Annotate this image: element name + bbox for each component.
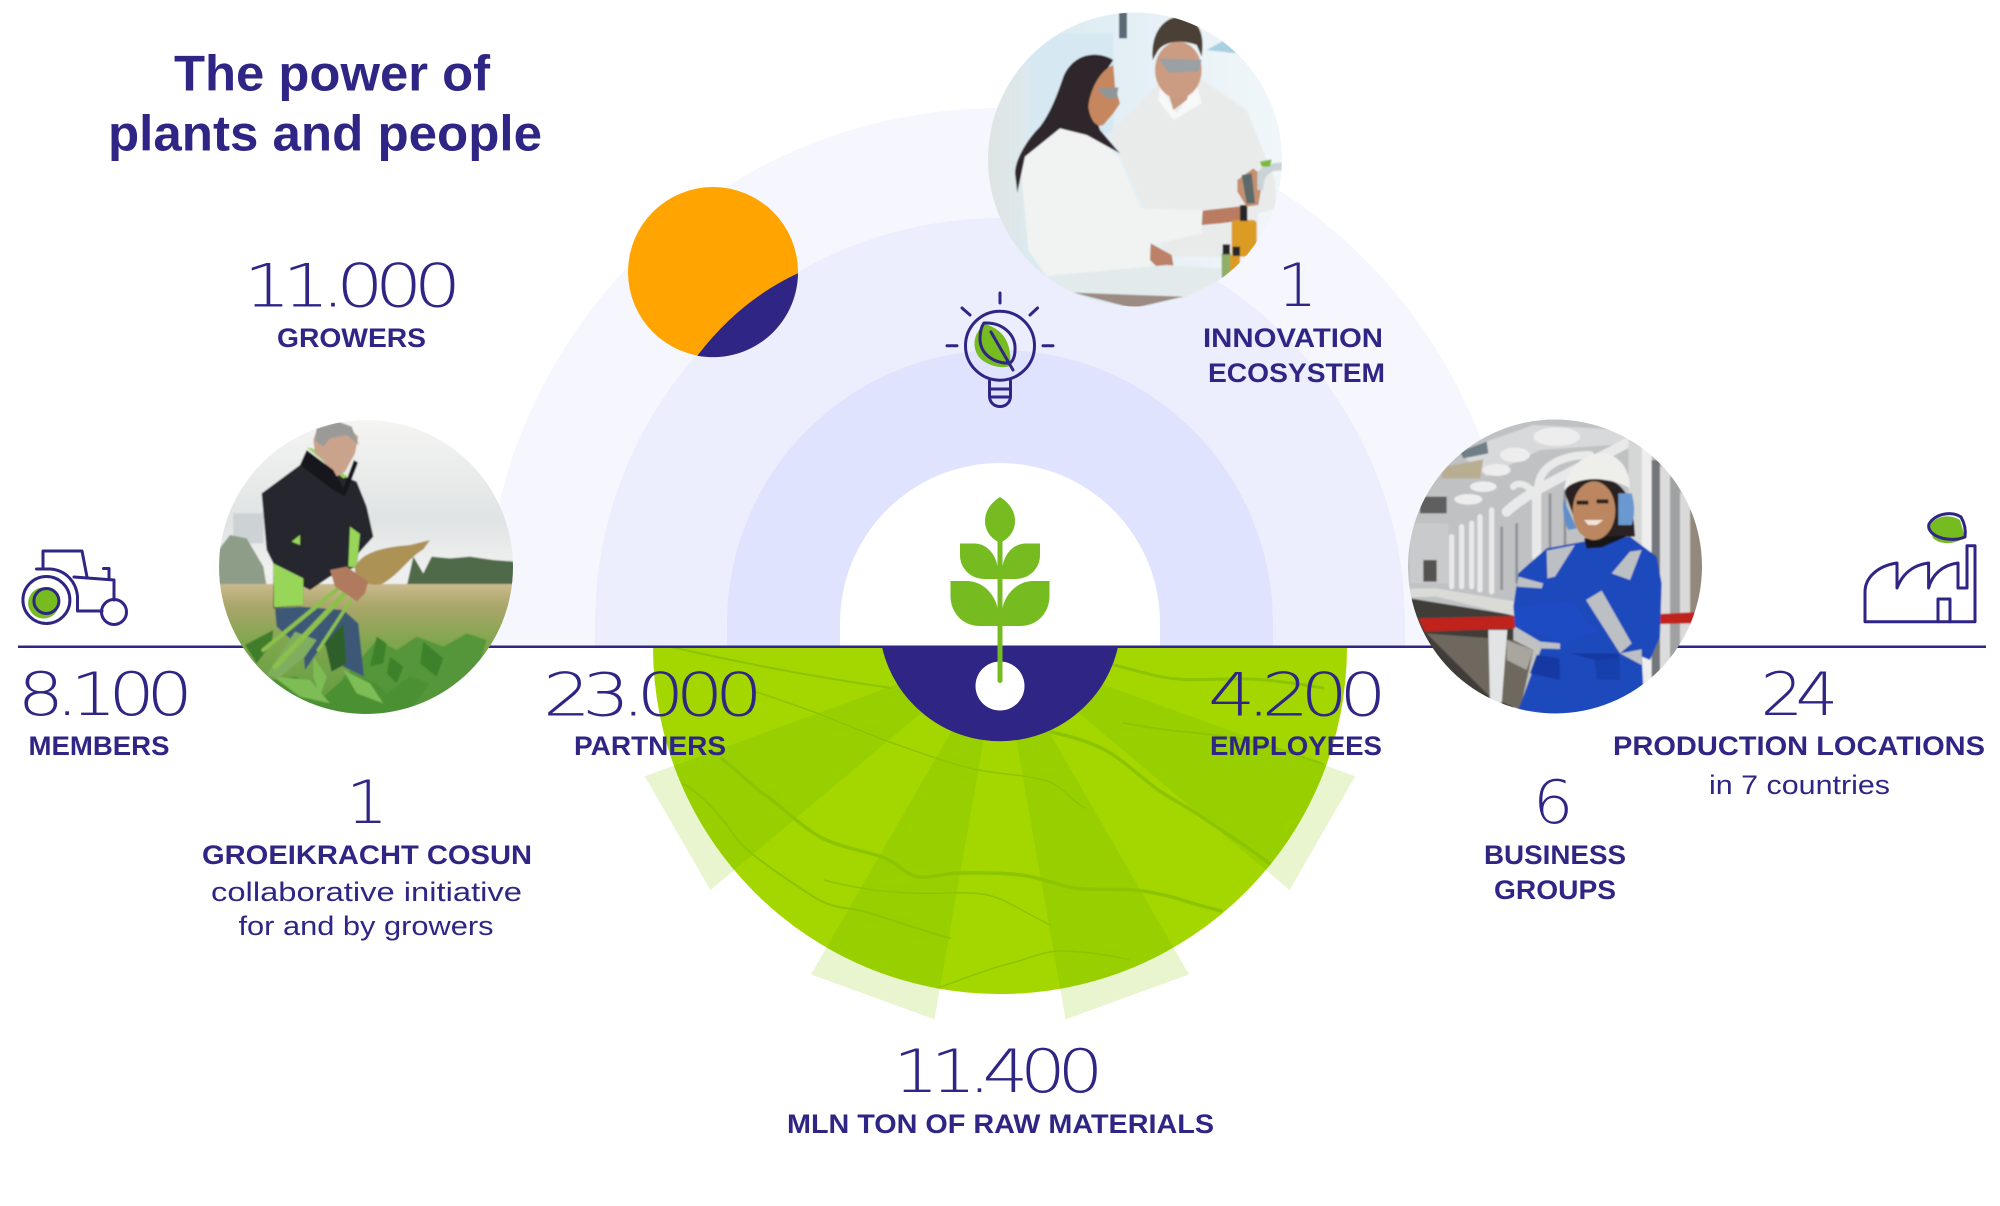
stat: business groups xyxy=(1484,768,1626,905)
stat: raw materials xyxy=(787,1037,1214,1139)
stat: innovation ecosystem xyxy=(1203,251,1385,388)
concentric arches xyxy=(485,108,1515,647)
stat: production locations: 24 xyxy=(1760,660,1834,730)
stat: members xyxy=(18,660,187,761)
stat: business groups: GROUPS xyxy=(1494,875,1616,905)
icon: lightbulb with leaf xyxy=(947,293,1053,406)
stat: innovation ecosystem: INNOVATION xyxy=(1203,323,1383,353)
photo: two scientists in a lab xyxy=(983,10,1287,310)
stat: production locations xyxy=(1613,660,1985,800)
icon: factory with leaf xyxy=(1865,514,1975,622)
stat: members: MEMBERS xyxy=(28,731,170,761)
title: The power of xyxy=(174,46,490,102)
stat: business groups: 6 xyxy=(1533,768,1568,838)
icon: plant xyxy=(950,497,1050,683)
stat: partners xyxy=(543,660,756,761)
stat: groeikracht cosun: GROEIKRACHT COSUN xyxy=(202,840,532,870)
stat: employees: EMPLOYEES xyxy=(1210,731,1382,761)
stat: groeikracht cosun: collaborative initiative xyxy=(211,877,522,907)
seed circle xyxy=(976,662,1024,710)
stat: innovation ecosystem: ECOSYSTEM xyxy=(1208,358,1385,388)
stat: production locations: PRODUCTION LOCATIONS xyxy=(1613,731,1985,761)
stat: growers xyxy=(244,252,455,353)
stat: growers: GROWERS xyxy=(277,323,426,353)
photo: plant worker in blue overalls xyxy=(1408,420,1702,714)
navy soil half circle xyxy=(882,647,1118,741)
green half circle with rays xyxy=(645,647,1355,1019)
stat: employees: 4.200 xyxy=(1208,660,1380,730)
stat: innovation ecosystem: 1 xyxy=(1277,251,1311,321)
title xyxy=(108,46,542,162)
stat: business groups: BUSINESS xyxy=(1484,840,1626,870)
stat: groeikracht cosun: 1 xyxy=(346,768,381,838)
horizontal baseline xyxy=(18,646,1986,648)
stat: raw materials: 11.400 xyxy=(893,1037,1097,1107)
stat: partners: 23.000 xyxy=(543,660,756,730)
stat: groeikracht cosun: for and by growers xyxy=(238,911,494,941)
title: plants and people xyxy=(108,106,542,162)
stat: raw materials: MLN TON OF RAW MATERIALS xyxy=(787,1109,1214,1139)
photo: farmer with sugar beet xyxy=(219,420,513,714)
stat: groeikracht cosun xyxy=(202,768,532,941)
stat: employees xyxy=(1208,660,1382,761)
stat: production locations: in 7 countries xyxy=(1709,770,1890,800)
stat: members: 8.100 xyxy=(18,660,187,730)
stat: partners: PARTNERS xyxy=(574,731,726,761)
orange sun circle xyxy=(628,187,798,357)
stat: growers: 11.000 xyxy=(244,252,455,322)
icon: tractor xyxy=(23,551,126,624)
